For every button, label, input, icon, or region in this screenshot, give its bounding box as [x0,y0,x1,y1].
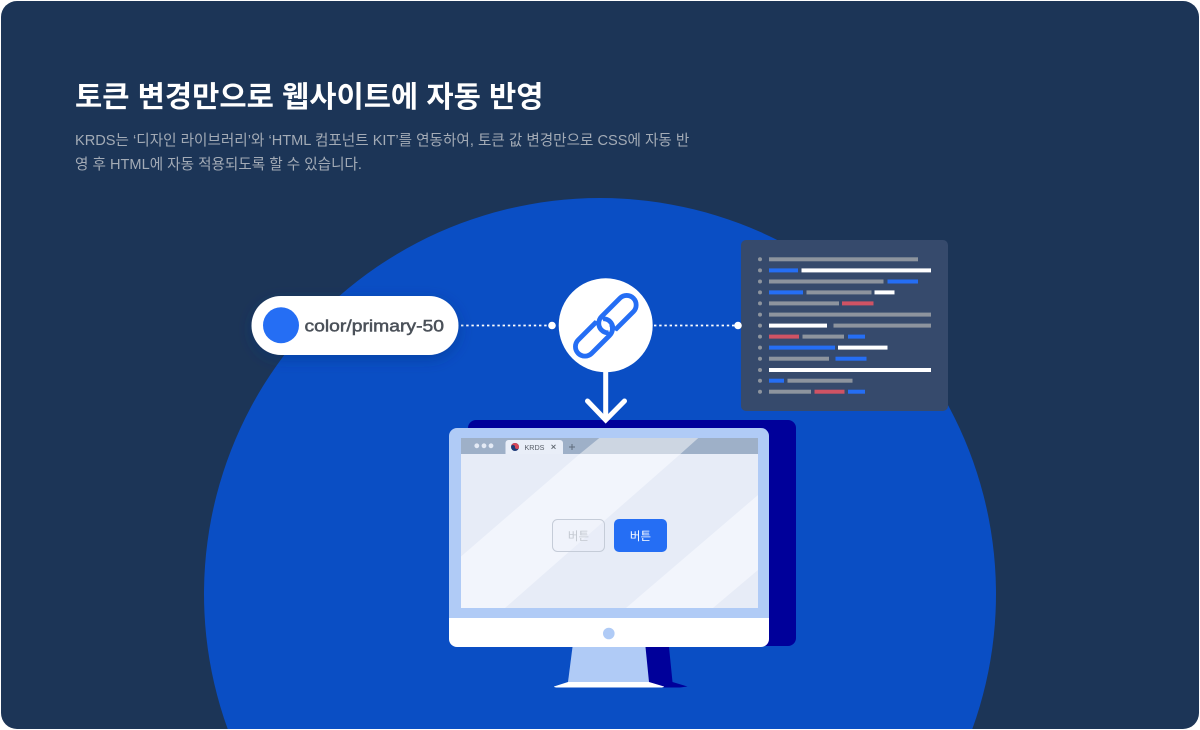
primary button: 버튼 [630,530,651,543]
window dots [474,443,493,448]
icon: chain link [572,292,640,360]
description text: 영 후 HTML에 자동 적용되도록 할 수 있습니다. [75,157,362,173]
tab close [552,445,556,449]
browser tab [506,440,563,454]
blue circle backdrop [204,198,996,729]
dotted connector: link to code [654,322,742,329]
monitor [449,428,769,688]
arrow down [588,368,624,420]
description text [75,132,689,173]
title: 토큰 변경만으로 웹사이트에 자동 반영 [75,81,544,114]
primary button [614,519,667,552]
token colour swatch [263,307,299,343]
disabled button [552,520,604,552]
tab label: KRDS [524,443,545,452]
illustration [204,198,996,729]
link circle [559,278,653,372]
description text: KRDS는 ‘디자인 라이브러리’와 ‘HTML 컴포넌트 KIT’를 연동하여, 토큰 값 변경만으로 CSS에 자동 반 [75,133,689,149]
token label: color/primary-50 [304,318,444,336]
icon: taegeuk favicon [511,443,519,451]
token pill [252,296,458,355]
code panel [741,240,948,411]
monitor shadow [468,420,796,688]
browser screen [461,438,758,608]
disabled button: 버튼 [568,530,589,543]
new tab plus [569,444,575,450]
monitor body [449,428,769,618]
dotted connector: pill to link [461,322,556,329]
monitor stand [568,647,649,682]
